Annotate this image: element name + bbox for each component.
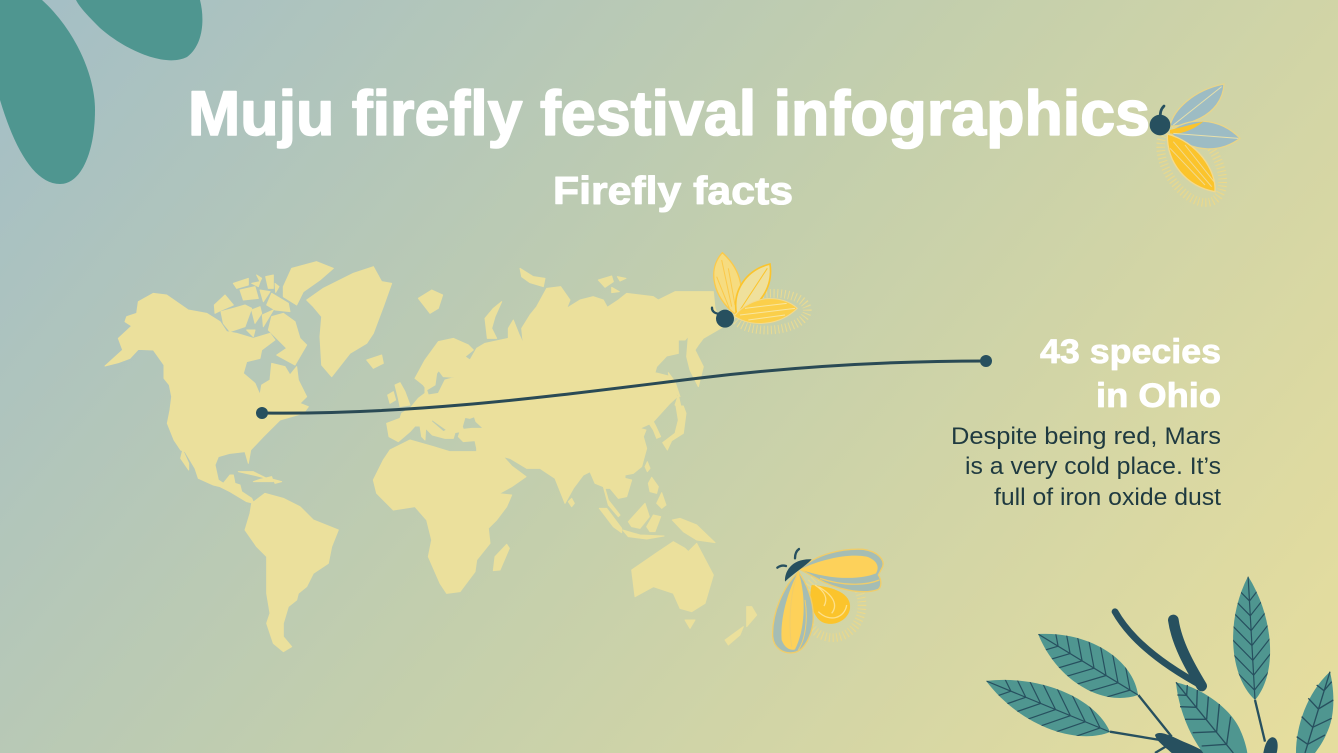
map: Eurasia xyxy=(387,268,723,517)
world map xyxy=(105,262,757,652)
leaf 3 xyxy=(1224,572,1279,701)
icon: firefly top right xyxy=(1148,84,1240,213)
callout body text: is a very cold place. It’s xyxy=(965,453,1221,480)
icon: firefly over Siberia xyxy=(712,253,808,332)
decorative leaves: top left xyxy=(0,0,202,184)
map: Arctic Canada islands xyxy=(214,275,307,365)
callout: 43 species in Ohio xyxy=(951,333,1221,511)
callout heading xyxy=(1040,333,1221,415)
leaf 1 xyxy=(1021,608,1153,719)
map: South America, Africa and Caribbean xyxy=(238,440,512,652)
connector line between Ohio and the label xyxy=(256,355,992,419)
map: East Asia islands xyxy=(568,406,715,543)
leaf 4 xyxy=(1176,682,1247,753)
callout heading: 43 species xyxy=(1040,333,1221,371)
leaf 5 xyxy=(1296,672,1333,753)
icon: firefly near Australia xyxy=(773,549,883,653)
callout body text: Despite being red, Mars xyxy=(951,423,1221,450)
callout body text: full of iron oxide dust xyxy=(994,484,1221,511)
map: North America and Greenland xyxy=(105,262,392,503)
callout body text xyxy=(951,423,1221,511)
map: Australia and New Zealand xyxy=(632,542,757,645)
decorative plant: bottom right xyxy=(974,572,1333,753)
callout heading: in Ohio xyxy=(1096,377,1221,415)
leaf 2 xyxy=(974,656,1120,753)
plant stems xyxy=(1110,612,1278,753)
subtitle: Firefly facts xyxy=(553,170,793,213)
title: Muju firefly festival infographics xyxy=(188,79,1150,149)
